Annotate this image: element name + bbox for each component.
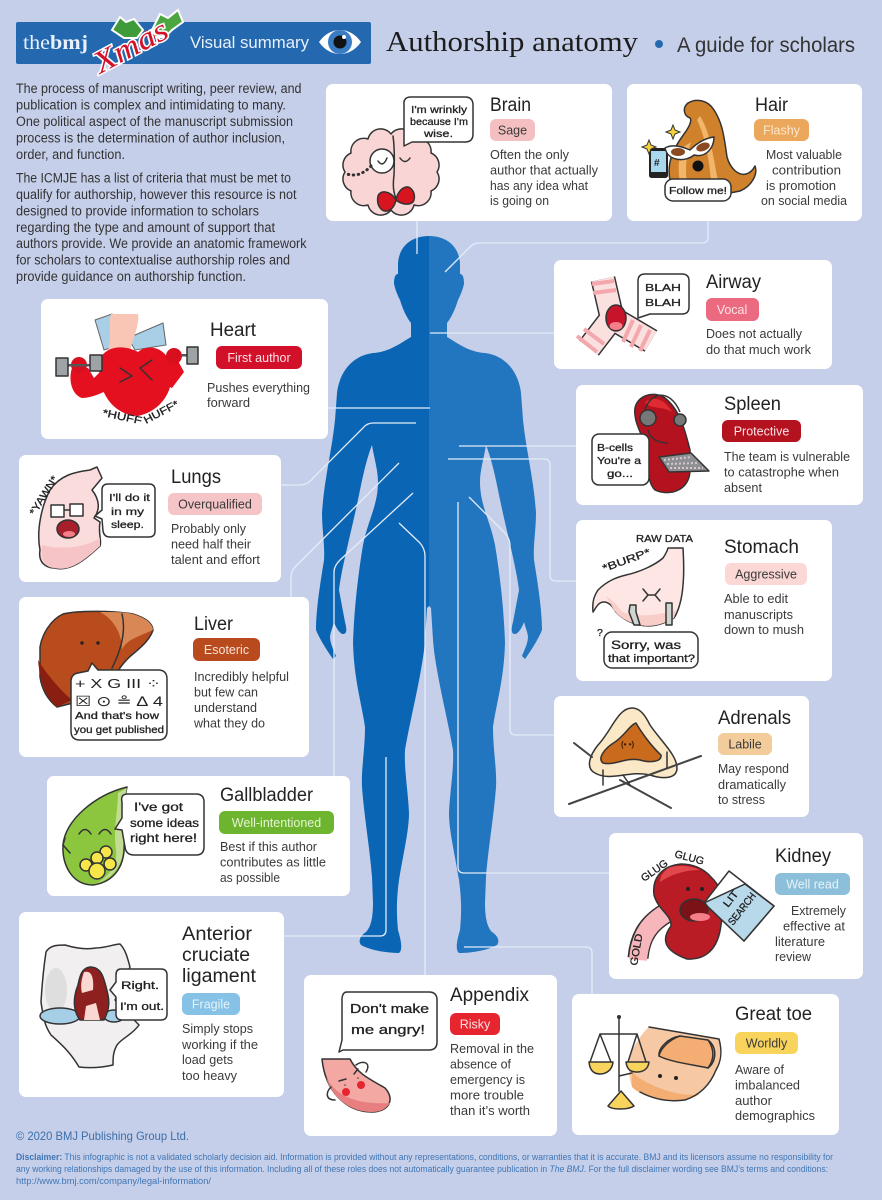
icon: adrenal gland on tightrope — [569, 708, 701, 808]
description: Probably only — [171, 521, 246, 536]
description: but few can — [194, 684, 258, 700]
panel: gallbladder — [47, 776, 350, 896]
icon: gallbladder with stones: I've got — [134, 800, 184, 814]
panel: heart — [41, 299, 328, 439]
tag — [193, 638, 260, 661]
panel: lungs — [19, 455, 281, 582]
panel: liver — [19, 597, 309, 757]
description: forward — [207, 395, 250, 410]
intro text: qualify for authorship, however this resource is not — [16, 187, 297, 202]
banner label: Visual summary — [190, 33, 309, 52]
description: talent and effort — [171, 552, 260, 567]
tag — [706, 298, 759, 321]
kidney labels: GOLD — [628, 932, 646, 967]
speech bubble — [71, 663, 167, 740]
description: review — [775, 949, 812, 964]
description: The team is vulnerable — [724, 449, 850, 464]
speech bubble — [592, 434, 649, 485]
description: literature — [775, 934, 825, 949]
tag: Risky — [460, 1018, 491, 1032]
description: author that actually — [490, 162, 598, 178]
description: demographics — [735, 1108, 815, 1123]
description: absent — [724, 480, 762, 495]
icon: brain with monocle: because I'm — [410, 116, 468, 128]
description: do that much work — [706, 342, 811, 357]
tag: Fragile — [192, 998, 230, 1012]
description — [490, 147, 598, 208]
intro text: designed to provide information to scholars — [16, 204, 259, 218]
intro text: process is the determination of author inclusion, — [16, 130, 285, 146]
panel: brain — [326, 84, 612, 221]
description: effective at — [783, 918, 845, 934]
tag — [182, 993, 240, 1015]
description — [207, 380, 310, 410]
icon: stomach with cutlery: that important? — [608, 653, 695, 665]
icon: hair with sunglasses: # — [654, 158, 660, 169]
description: absence of — [450, 1056, 511, 1072]
tag: Aggressive — [735, 568, 797, 582]
body silhouette — [316, 236, 542, 953]
icon: toe and scales — [589, 1015, 721, 1109]
description: Most valuable — [766, 147, 842, 162]
tag — [490, 119, 535, 141]
icon: adrenal gland on tightrope: (• •) — [621, 740, 634, 749]
speech bubble — [115, 794, 204, 855]
description: is promotion — [766, 178, 836, 193]
header banner — [16, 10, 371, 81]
heart sound effect: *HUFF — [101, 407, 143, 427]
icon: liver: ☒ ⊙ ≗ ∆ 4 — [75, 693, 163, 709]
tag — [168, 493, 262, 515]
description: more trouble — [450, 1088, 524, 1102]
sunglasses — [665, 137, 714, 160]
icon: stomach with cutlery: Sorry, was — [611, 638, 681, 652]
intro text: The ICMJE has a list of criteria that must be met to — [16, 170, 291, 186]
tag: Flashy — [763, 124, 801, 138]
icon: spleen with headset: go... — [607, 468, 633, 480]
description: Aware of — [735, 1062, 784, 1077]
icon: kidney drinking: SEARCH — [726, 891, 759, 928]
icon: heart lifting weights: HUFF* — [142, 398, 181, 427]
tag — [450, 1013, 500, 1035]
scales — [590, 1017, 646, 1091]
description: on social media — [761, 193, 848, 208]
yawn label: *YAWN* — [27, 474, 61, 518]
icon: gallbladder with stones: right here! — [130, 831, 197, 845]
description: is going on — [490, 193, 549, 208]
tag — [754, 119, 809, 141]
icon: spleen with headset — [592, 394, 709, 493]
tag: Well read — [786, 878, 839, 892]
speech bubble — [404, 97, 473, 146]
tag: Worldly — [746, 1036, 788, 1050]
speech bubble — [339, 992, 437, 1052]
panel: kidney — [609, 833, 863, 979]
icon: liver: you get published — [74, 724, 164, 736]
sparkle icons — [642, 125, 680, 154]
description — [775, 903, 846, 964]
intro text: authors provide. We provide an anatomic framework — [16, 236, 307, 251]
description — [450, 1041, 534, 1118]
disclaimer: http://www.bmj.com/company/legal-information/ — [16, 1176, 212, 1186]
description: load gets — [182, 1052, 233, 1067]
heading: Anterior — [182, 924, 253, 945]
icon: hair with sunglasses — [642, 100, 756, 201]
heading: ligament — [182, 966, 257, 987]
tag: Protective — [734, 424, 789, 438]
icon: gallbladder with stones — [63, 787, 204, 885]
subtitle: A guide for scholars — [677, 34, 855, 57]
panel: great toe — [572, 994, 839, 1135]
icon: brain with monocle: I'm wrinkly — [411, 104, 468, 116]
description: Incredibly helpful — [194, 669, 289, 684]
description — [761, 147, 848, 208]
description: than it’s worth — [450, 1103, 530, 1118]
speech bubble — [110, 969, 167, 1020]
tag — [216, 346, 302, 369]
icon: trachea: BLAH — [645, 282, 681, 294]
description: author — [735, 1093, 773, 1108]
icon: yawning lung: I'll do it — [109, 492, 150, 504]
icon: stomach with cutlery: ? — [597, 627, 603, 639]
description — [181, 1021, 258, 1083]
tag — [725, 563, 807, 585]
stomach label: RAW DATA — [636, 533, 693, 545]
icon: stomach with cutlery — [593, 533, 698, 668]
description: working if the — [181, 1037, 258, 1052]
heading: Appendix — [450, 985, 529, 1006]
heading: Spleen — [724, 394, 781, 415]
description — [706, 326, 811, 357]
heading: Great toe — [735, 1004, 812, 1025]
description — [171, 521, 260, 567]
logo: the bmj: thebmj — [23, 32, 88, 54]
logo: Xmas: Xmas — [85, 12, 174, 81]
icon: kidney drinking: GLUG — [673, 848, 705, 868]
intro text: for scholars to contextualise authorship roles and — [16, 252, 290, 268]
disclaimer — [16, 1152, 833, 1186]
description: Does not actually — [706, 326, 802, 341]
heading: Liver — [194, 614, 234, 635]
description: May respond — [718, 761, 789, 776]
icon: trachea — [577, 274, 689, 352]
description: to catastrophe when — [724, 464, 839, 480]
icon: gallbladder with stones: some ideas — [130, 816, 199, 830]
heading: Kidney — [775, 846, 831, 867]
heading: Stomach — [724, 537, 799, 558]
intro text: publication is complex and intimidating to many. — [16, 98, 286, 112]
intro text: One political aspect of the manuscript submission — [16, 114, 293, 129]
intro text — [16, 81, 307, 284]
description: imbalanced — [735, 1078, 800, 1092]
icon: eye — [319, 30, 361, 54]
speech bubble — [95, 484, 155, 537]
icon: liver: + X G III ⁘ — [75, 676, 161, 691]
tag: Overqualified — [178, 498, 252, 512]
icon: hair with sunglasses: Follow me! — [669, 185, 727, 197]
tag: Labile — [728, 738, 762, 752]
description: down to mush — [724, 622, 804, 637]
icon: liver — [38, 611, 167, 740]
heading — [182, 924, 257, 987]
panel: airway — [554, 260, 832, 369]
intro text: provide guidance on authorship function. — [16, 269, 246, 284]
heading: Gallbladder — [220, 785, 314, 806]
tag — [722, 420, 801, 442]
description: Able to edit — [724, 591, 788, 606]
description: Extremely — [791, 903, 846, 918]
icon: kidney drinking: LIT — [721, 888, 742, 910]
icon: stomach with cutlery: *BURP* — [601, 546, 652, 575]
intro text: The process of manuscript writing, peer review, and — [16, 81, 302, 96]
icon: trachea: BLAH — [645, 297, 681, 309]
tag: Sage — [498, 124, 527, 138]
heading: cruciate — [182, 945, 250, 966]
speech bubble — [638, 274, 689, 318]
panel: appendix — [304, 975, 557, 1136]
phone — [649, 148, 668, 178]
description: contribution — [772, 162, 841, 178]
icon: spleen with headset: B-cells — [597, 442, 633, 454]
icon: kidney drinking — [628, 848, 774, 967]
tag: Well-intentioned — [232, 816, 321, 830]
description: Often the only — [490, 147, 569, 162]
tag — [219, 811, 334, 834]
description: manuscripts — [724, 607, 793, 622]
heading: Adrenals — [718, 708, 791, 729]
heading: Hair — [755, 95, 789, 116]
description — [220, 839, 326, 885]
icon: kidney drinking: GLUG — [639, 857, 670, 884]
tag: Esoteric — [204, 643, 249, 657]
icon: knee joint: I'm out. — [120, 1001, 164, 1013]
connector lines — [281, 221, 708, 994]
tag — [718, 733, 772, 755]
icon: yawning lung: in my — [111, 506, 145, 518]
title separator dot — [655, 40, 663, 48]
icon: angry appendix: me angry! — [351, 1022, 425, 1037]
intro text: order, and function. — [16, 147, 125, 162]
description: too heavy — [182, 1068, 237, 1083]
title: Authorship anatomy — [386, 27, 638, 58]
heading: Brain — [490, 95, 531, 116]
copyright: © 2020 BMJ Publishing Group Ltd. — [16, 1129, 189, 1143]
description — [193, 669, 289, 730]
description: contributes as little — [220, 854, 326, 870]
panel: hair — [627, 84, 862, 221]
icon: knee joint: Right. — [121, 980, 159, 992]
heading: Airway — [706, 272, 761, 293]
tag: First author — [227, 351, 291, 365]
tag: Vocal — [717, 303, 747, 317]
icon: angry appendix: Don't make — [350, 1001, 429, 1016]
description: what they do — [193, 716, 265, 730]
intro text: regarding the type and amount of support that — [16, 220, 275, 235]
tag — [775, 873, 850, 895]
description: as possible — [220, 870, 280, 885]
description: Pushes everything — [207, 380, 310, 395]
description — [724, 449, 850, 495]
speech bubble — [665, 179, 731, 201]
icon: knee joint — [40, 944, 167, 1068]
description: has any idea what — [490, 178, 588, 193]
icon: holly — [112, 10, 183, 40]
icon: spleen with headset: You're a — [597, 455, 641, 467]
panel: adrenals — [554, 696, 809, 817]
icon: yawning lung: sleep. — [111, 519, 144, 531]
disclaimer: Disclaimer: This infographic is not a validated scholarly decision aid. Information is provided without any representations, conditions, or warranties that it is accurate. BMJ and its licensors assume no responsibility for — [16, 1152, 833, 1162]
icon: angry appendix — [322, 992, 437, 1112]
description: dramatically — [718, 777, 786, 792]
heading: Heart — [210, 320, 257, 341]
description: Removal in the — [450, 1041, 534, 1056]
icon: brain with monocle: wise. — [423, 128, 453, 140]
description: to stress — [718, 792, 765, 807]
icon: heart lifting weights — [56, 314, 198, 427]
icon: liver: And that's how — [75, 710, 159, 722]
description: Best if this author — [220, 839, 318, 854]
description: understand — [194, 700, 257, 715]
panel: spleen — [576, 385, 863, 505]
disclaimer: any working relationships damaged by the use of this information. Including all of these roles does not automatically guarantee publication in The BMJ. For the full disclaimer wording see BMJ’s terms and conditions: — [16, 1164, 828, 1174]
heading: Lungs — [171, 467, 221, 488]
icon: yawning lung — [27, 467, 155, 569]
description — [735, 1062, 815, 1123]
panel: anterior cruciate ligament — [19, 912, 284, 1097]
description: need half their — [171, 536, 252, 552]
description: emergency is — [450, 1072, 525, 1087]
tag — [735, 1032, 798, 1054]
description — [724, 591, 804, 637]
icon: brain with monocle — [343, 97, 473, 215]
description — [718, 761, 789, 807]
speech bubble — [604, 632, 698, 668]
panel: stomach — [576, 520, 832, 681]
description: Simply stops — [182, 1021, 253, 1036]
